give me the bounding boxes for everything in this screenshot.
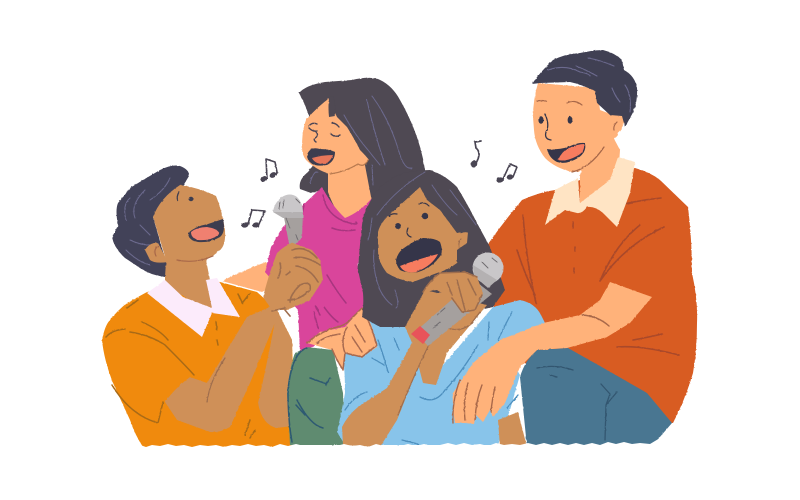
face details <box>307 96 368 174</box>
shirt folds <box>345 312 518 444</box>
front arm <box>342 293 447 447</box>
shirt folds <box>106 293 255 438</box>
microphone <box>273 194 303 249</box>
face <box>533 83 618 172</box>
chest and neck <box>405 290 487 385</box>
man in orange-red shirt, right <box>488 50 697 423</box>
face <box>302 97 369 174</box>
hand <box>423 272 483 312</box>
face <box>153 185 225 263</box>
music notes <box>241 141 517 228</box>
near arm <box>165 306 279 432</box>
neck <box>328 160 372 220</box>
hair <box>358 170 505 327</box>
hand holding mic <box>263 243 323 310</box>
note pair beside right man <box>496 164 517 183</box>
man's arm, leg and jeans, foreground right <box>453 282 672 447</box>
hair strands <box>125 178 170 265</box>
shirt folds <box>296 195 357 328</box>
hair strands <box>368 172 476 308</box>
skin leg gap <box>498 412 527 447</box>
woman with microphone, front centre <box>342 170 505 447</box>
hair strands <box>548 58 630 112</box>
hair strands <box>310 96 412 185</box>
face <box>378 187 468 282</box>
far arm <box>258 310 292 428</box>
neck <box>165 255 212 308</box>
orange shirt <box>102 280 295 447</box>
hair <box>112 166 189 277</box>
blue shirt <box>337 300 546 445</box>
ear <box>606 113 624 135</box>
note pair beside left man's mouth <box>241 210 265 228</box>
hair <box>532 50 637 127</box>
microphone <box>411 252 504 346</box>
shirt folds and buttons <box>517 198 679 355</box>
note pair above left man <box>260 159 277 183</box>
single note beside front woman's head <box>470 141 481 169</box>
face features <box>155 192 224 261</box>
woman in pink singing, back centre <box>222 78 428 352</box>
arm <box>453 282 652 424</box>
red shirt <box>488 168 697 423</box>
white collar <box>147 278 240 337</box>
man in orange shirt, left <box>102 166 323 447</box>
pink woman's hand on shoulder and green knee <box>287 300 546 445</box>
face features <box>389 203 461 272</box>
jeans <box>520 348 672 447</box>
ear <box>145 243 168 263</box>
pink woman's hand <box>307 308 377 370</box>
hair: long dark hair <box>299 78 428 240</box>
torn paper bottom edge <box>130 410 700 500</box>
green sleeve knee <box>287 347 345 445</box>
arm behind the man's back <box>222 262 280 292</box>
neck <box>580 135 620 203</box>
cream collar <box>545 157 635 227</box>
pink shirt <box>265 187 372 352</box>
face features <box>537 100 617 172</box>
